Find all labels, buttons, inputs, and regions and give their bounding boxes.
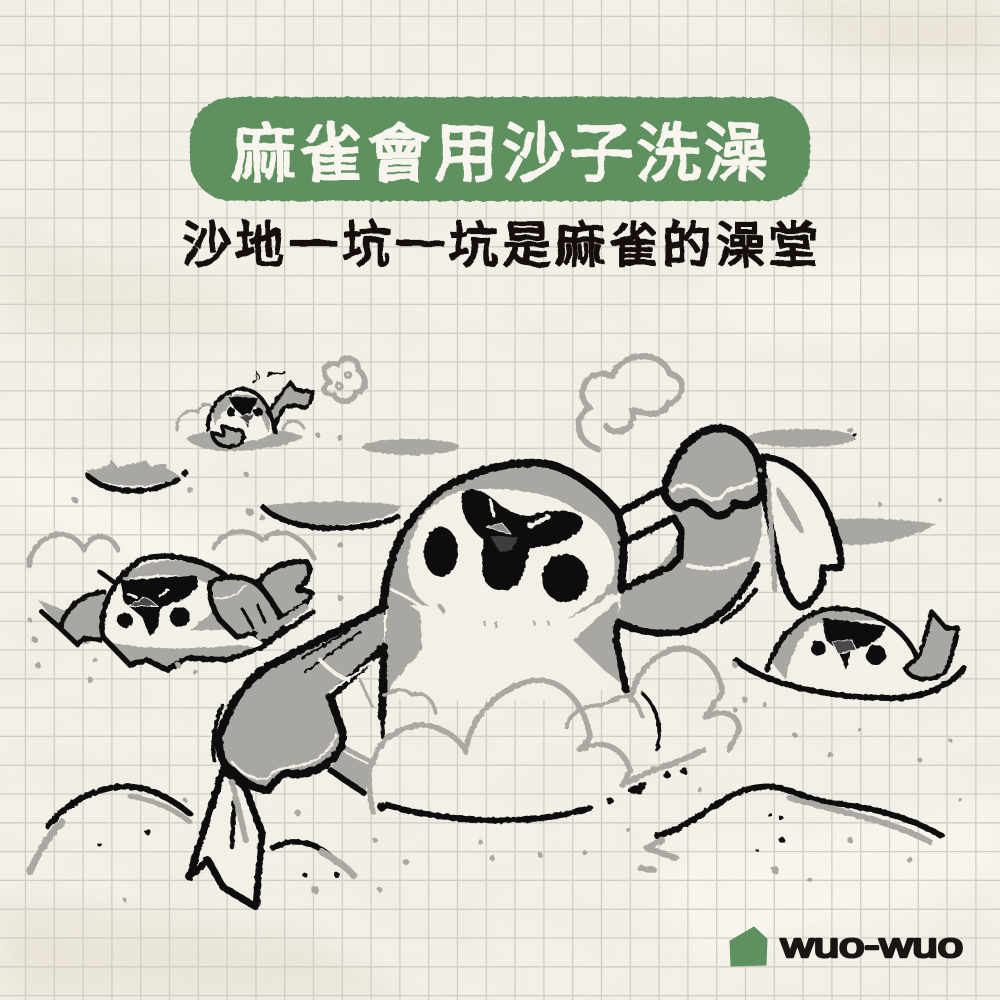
tilde: [268, 372, 284, 376]
body bottom line: [388, 805, 590, 820]
small flower dust cloud: [324, 358, 365, 401]
lower body: [330, 745, 376, 793]
dust puffs: [29, 532, 314, 566]
subtitle: 沙地一坑一坑是麻雀的澡堂: [182, 219, 818, 273]
mask: [120, 576, 198, 636]
dust puffs: [177, 404, 304, 430]
sparrow: left, in hole: [29, 532, 314, 670]
cheek right: [542, 554, 588, 602]
mask: [822, 618, 886, 670]
wing: [905, 612, 958, 679]
tail: [189, 770, 262, 907]
sand holes: [86, 429, 936, 545]
hole edge: [736, 660, 964, 698]
mound: bottom centre-left: [273, 842, 354, 876]
face: [424, 489, 588, 602]
body: [102, 556, 285, 670]
hole: centre top: [362, 439, 460, 455]
big dust cloud, upper right: [579, 356, 682, 449]
beak: [486, 523, 511, 534]
title text: 麻雀會用沙子洗澡: [232, 118, 768, 190]
far wing feathers: [763, 457, 841, 607]
front wing: [210, 577, 283, 642]
mound: left: [30, 787, 190, 872]
face: [228, 396, 258, 428]
right shoulder: [573, 600, 627, 688]
sparrow: right, in hole: [736, 609, 964, 698]
near arm, right, raised: [616, 428, 762, 690]
sparrow: main, large: [189, 428, 841, 907]
eye highlights: [490, 500, 494, 516]
music note: ♪: [250, 363, 262, 390]
sand hole under sparrow: [186, 429, 303, 451]
title banner: [190, 97, 810, 201]
arm raised: [268, 382, 313, 424]
illustration: [28, 356, 964, 907]
wing: [212, 426, 243, 447]
sparrow: singing, top left: [177, 382, 313, 451]
head and body fill: [382, 463, 624, 700]
mound: right: [640, 787, 942, 870]
beak: [128, 597, 158, 606]
left shoulder: [384, 593, 422, 703]
hole: right: [830, 518, 936, 545]
sand splash clouds: [360, 648, 739, 812]
head outline: [382, 463, 624, 612]
mask: [461, 489, 583, 590]
hand: [664, 428, 762, 516]
sand mounds: [30, 787, 942, 876]
head cap: [382, 463, 624, 623]
wordmark: wuo-wuo: [780, 927, 963, 965]
hole: upper right: [748, 429, 856, 447]
hole: centre left: [262, 502, 402, 528]
cheek left: [424, 527, 458, 577]
hole: upper left: [86, 460, 180, 491]
chin ticks: [485, 622, 549, 627]
logo: [730, 927, 963, 966]
sand specks: [98, 433, 857, 878]
near arm, left, down: [213, 607, 384, 790]
icon: house: [730, 927, 767, 966]
back wing: [258, 562, 312, 617]
left wing: [38, 593, 110, 645]
